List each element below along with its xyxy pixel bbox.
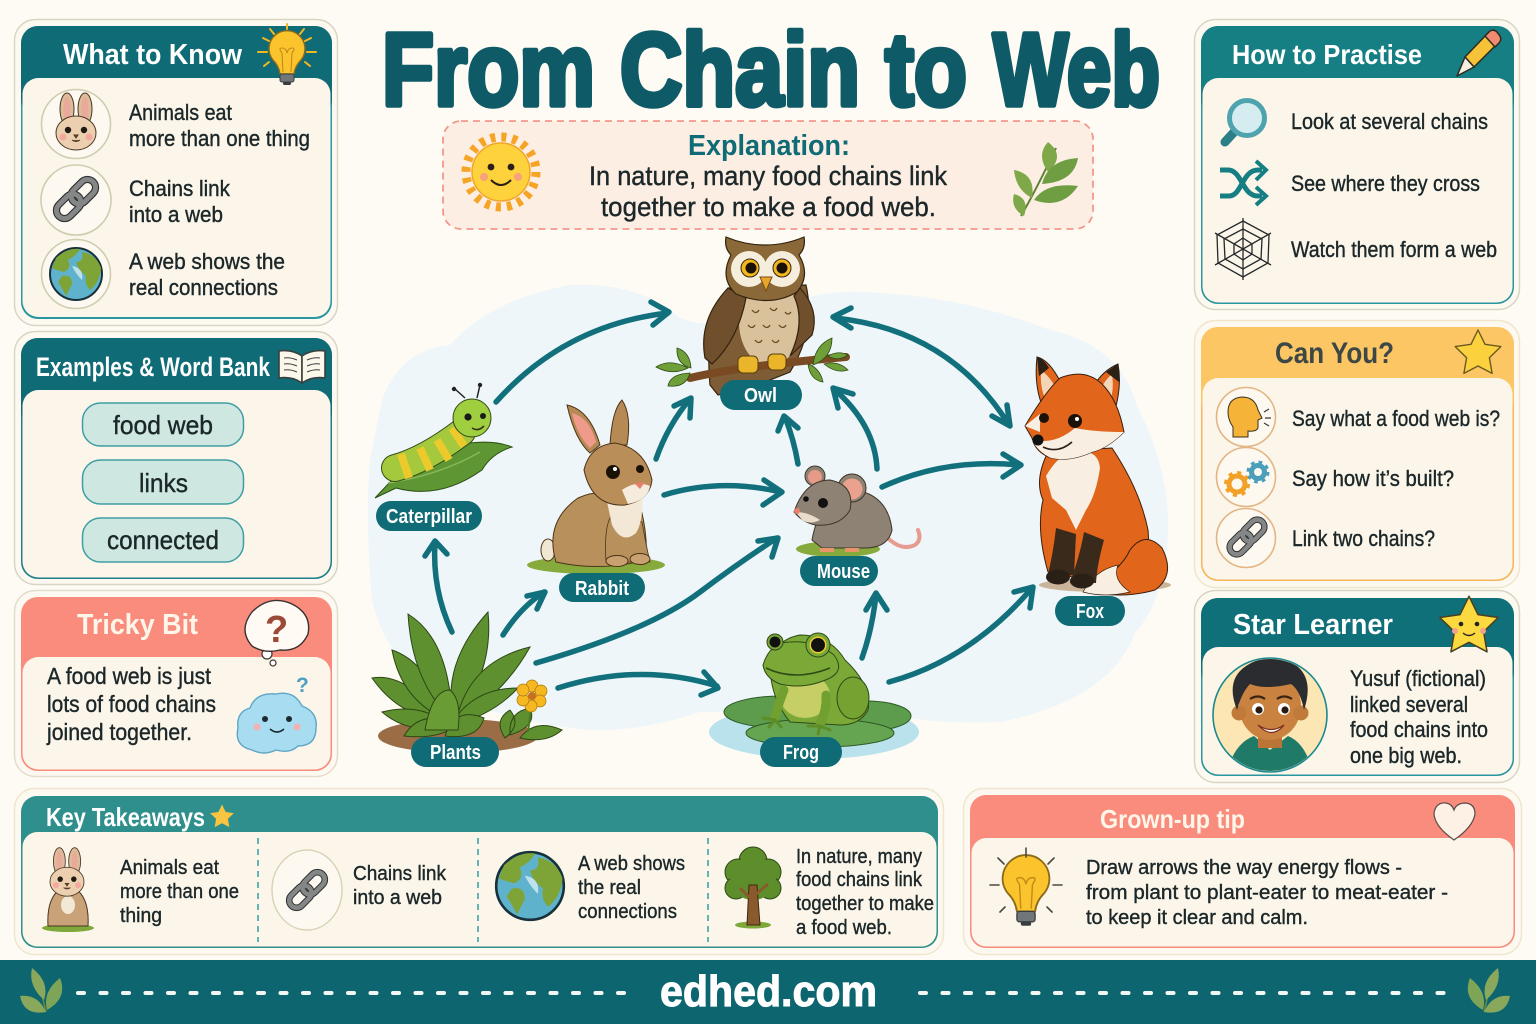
arrow: caterpillar to owl — [496, 302, 669, 402]
arrow: mouse to fox — [882, 454, 1021, 487]
text: a web shows: A web shows — [578, 852, 685, 875]
icon: sun — [466, 137, 536, 207]
label: mouse — [800, 556, 878, 586]
icon: speaking head — [1216, 388, 1276, 446]
arrow: mouse to owl right — [833, 388, 877, 469]
icon: sitting bunny — [42, 848, 94, 932]
word: food web: food web — [113, 410, 213, 440]
word: links: links — [139, 468, 188, 498]
text: a web shows: connections — [578, 900, 677, 923]
text: tricky bit — [46, 663, 216, 745]
title — [382, 12, 1160, 127]
explanation text — [589, 161, 947, 222]
text: watch them form a web: Watch them form a web — [1291, 237, 1497, 262]
icon: crossing arrows — [1220, 161, 1266, 205]
arrow: owl and fox — [833, 308, 1010, 426]
text: animals eat: thing — [120, 904, 162, 927]
icon: heart — [1434, 803, 1475, 840]
arrow: plants to mouse — [536, 538, 778, 663]
word: connected: connected — [107, 525, 219, 555]
label: rabbit: Rabbit — [575, 578, 629, 600]
animal: caterpillar — [375, 383, 512, 498]
panel: can you — [1194, 320, 1520, 588]
icon: worried cloud — [237, 674, 316, 753]
label: rabbit — [559, 573, 645, 602]
panel: what to know — [14, 20, 338, 326]
text: a web shows: the real — [578, 876, 641, 899]
icon: magnifier — [1225, 100, 1264, 142]
text: in nature: In nature, many — [796, 846, 922, 868]
heading: examples and word bank: Examples & Word Bank — [36, 352, 271, 382]
text: grown-up tip — [1086, 856, 1448, 929]
text: look at several chains: Look at several chains — [1291, 109, 1488, 134]
icon: star — [210, 805, 234, 827]
plants — [372, 612, 562, 753]
text: a web shows — [578, 852, 685, 923]
label: owl: Owl — [744, 385, 777, 407]
label: frog — [760, 737, 842, 767]
text: see where they cross: See where they cross — [1291, 171, 1480, 196]
panel: tricky bit — [14, 590, 338, 776]
text: a web shows: A web shows the — [129, 249, 285, 274]
icon: star — [1455, 330, 1501, 373]
text: grown-up tip: Draw arrows the way energy flows - — [1086, 856, 1402, 879]
text: in nature: food chains link — [796, 869, 923, 891]
food web background blob — [368, 285, 1168, 730]
text: animals eat: Animals eat — [129, 100, 232, 125]
text: link two chains: Link two chains? — [1292, 526, 1435, 551]
icon: chain — [41, 165, 111, 235]
text: animals eat — [129, 100, 310, 151]
animal: frog on lily pad — [709, 633, 919, 759]
icon: leaf sprig — [1013, 142, 1078, 216]
explanation box — [443, 121, 1093, 229]
text: animals eat: Animals eat — [120, 856, 219, 879]
arrow: mouse to owl — [778, 416, 798, 464]
animal: mouse — [794, 466, 919, 557]
portrait: yusuf — [1213, 658, 1327, 780]
text: in nature: a food web. — [796, 917, 892, 939]
animal: fox — [1025, 357, 1171, 595]
icon: chain — [1216, 508, 1276, 568]
heading: star learner: Star Learner — [1233, 609, 1393, 641]
icon: spider web — [1215, 218, 1271, 280]
icon: leaf sprig right — [1468, 968, 1510, 1013]
text: tricky bit: joined together. — [46, 719, 192, 745]
text: chains link — [353, 862, 447, 909]
label: caterpillar: Caterpillar — [386, 506, 472, 528]
icon: gears — [1216, 448, 1276, 506]
footer website: edhed.com — [660, 967, 877, 1016]
animal: owl — [656, 237, 848, 395]
explanation text: together to make a food web. — [601, 192, 936, 222]
text: in nature — [796, 846, 934, 939]
icon: light bulb — [258, 24, 316, 85]
label: mouse: Mouse — [817, 561, 870, 583]
panel: how to practise — [1194, 20, 1520, 310]
icon: pencil — [1457, 30, 1501, 76]
arrow: frog to fox — [889, 587, 1033, 682]
text: a web shows — [129, 249, 285, 300]
word: links — [82, 460, 244, 504]
text: animals eat — [120, 856, 239, 927]
text: animals eat: more than one thing — [129, 126, 310, 151]
word: connected — [82, 518, 244, 562]
arrow: plants to caterpillar — [425, 541, 452, 632]
label: frog: Frog — [783, 742, 819, 764]
heading: grown-up tip: Grown-up tip — [1100, 804, 1245, 834]
text: yusuf: Yusuf (fictional) — [1350, 666, 1486, 691]
label: owl — [720, 380, 802, 410]
text: say how: Say how it’s built? — [1292, 466, 1454, 491]
panel: star learner — [1194, 590, 1520, 782]
icon: leaf sprig left — [20, 968, 62, 1013]
title: Chain — [620, 12, 860, 127]
arrow: rabbit to mouse — [664, 480, 782, 505]
word: food web — [82, 403, 244, 446]
title: to — [885, 12, 967, 127]
label: fox: Fox — [1076, 601, 1104, 623]
text: animals eat: more than one — [120, 880, 239, 903]
icon: smiling star — [1440, 596, 1498, 652]
heading: what to know: What to Know — [63, 39, 242, 71]
text: chains link: into a web — [353, 886, 442, 909]
heading: key takeaways: Key Takeaways — [46, 802, 205, 832]
text: yusuf: linked several — [1350, 692, 1468, 717]
panel: grown-up tip — [964, 788, 1522, 954]
icon: bunny face — [42, 90, 110, 158]
text: yusuf — [1350, 666, 1488, 768]
heading: how to practise: How to Practise — [1232, 39, 1422, 70]
text: a web shows: real connections — [129, 275, 278, 300]
icon: thought bubble: ? — [265, 609, 288, 651]
text: chains link: into a web — [129, 202, 223, 227]
panel: key takeaways — [14, 788, 944, 954]
arrow: plants to frog — [558, 672, 718, 695]
text: yusuf: one big web. — [1350, 743, 1462, 768]
animal: rabbit — [527, 400, 665, 574]
icon: globe — [42, 240, 110, 308]
arrow: rabbit to owl — [656, 398, 691, 459]
text: tricky bit: A food web is just — [47, 663, 212, 689]
icon: tree — [725, 847, 781, 928]
icon: worried cloud: ? — [296, 674, 309, 697]
label: fox — [1055, 596, 1125, 626]
explanation text: In nature, many food chains link — [589, 161, 947, 191]
text: tricky bit: lots of food chains — [47, 691, 216, 717]
text: say what: Say what a food web is? — [1292, 406, 1500, 431]
icon: chain — [272, 850, 342, 930]
icon: open book — [279, 351, 325, 383]
text: chains link: Chains link — [353, 862, 447, 885]
footer bar — [0, 960, 1536, 1024]
heading: can you: Can You? — [1275, 337, 1394, 370]
text: grown-up tip: from plant to plant-eater to meat-eater - — [1086, 881, 1448, 904]
text: grown-up tip: to keep it clear and calm. — [1086, 906, 1308, 929]
explanation heading: Explanation: — [688, 130, 850, 162]
icon: thought bubble — [245, 600, 309, 666]
arrow: frog to mouse — [862, 593, 887, 658]
food web arrows — [425, 302, 1033, 695]
text: yusuf: food chains into — [1350, 717, 1488, 742]
title: From — [382, 12, 595, 127]
label: plants — [411, 737, 499, 767]
icon: light bulb — [990, 848, 1062, 926]
text: chains link: Chains link — [129, 176, 231, 201]
icon: globe — [496, 852, 564, 920]
text: in nature: together to make — [796, 893, 934, 915]
title: Web — [993, 12, 1160, 127]
text: chains link — [129, 176, 231, 227]
arrow: plants to rabbit — [503, 592, 545, 635]
label: plants: Plants — [430, 742, 481, 764]
heading: tricky bit: Tricky Bit — [77, 609, 198, 641]
label: caterpillar — [376, 501, 482, 531]
panel: examples and word bank — [14, 332, 338, 584]
